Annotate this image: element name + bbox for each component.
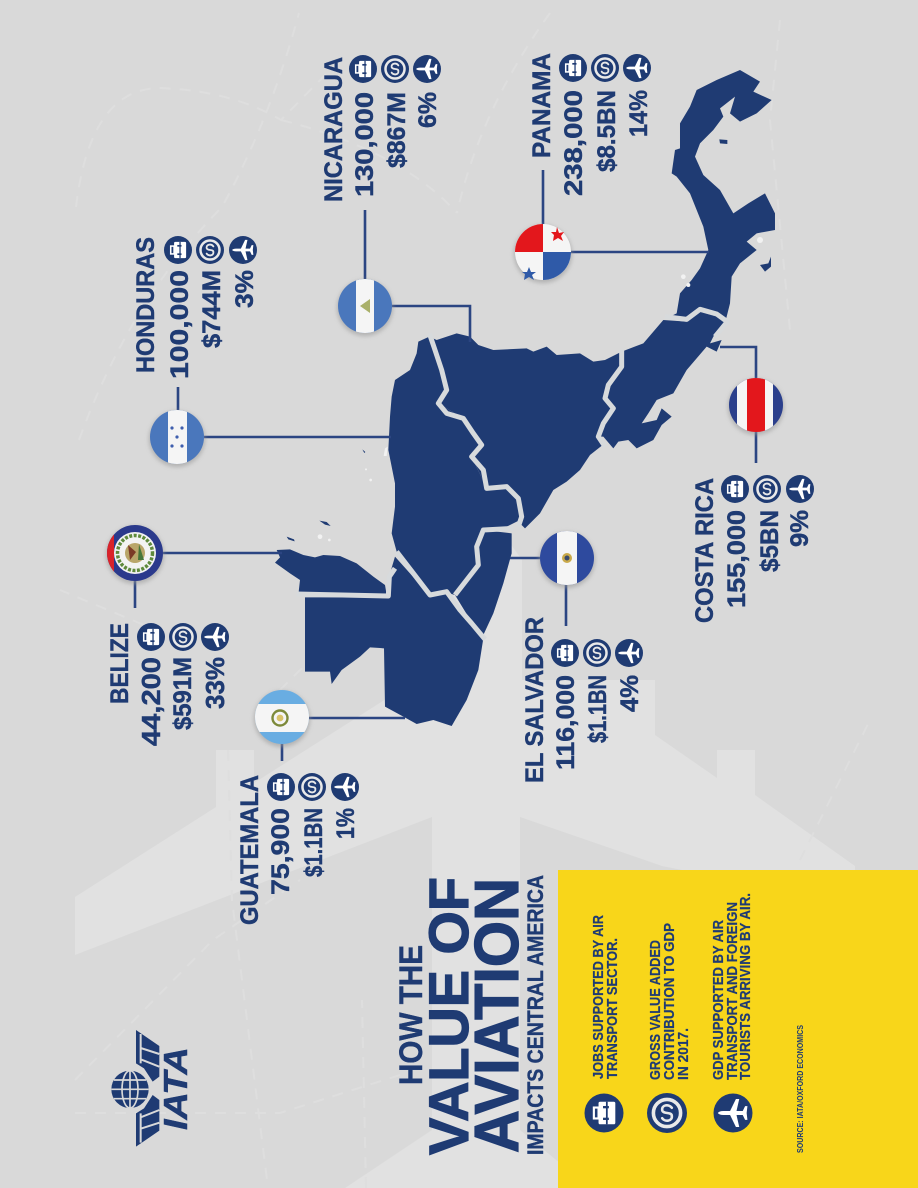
GDP share figure: 9% (786, 510, 814, 547)
small islands (287, 139, 771, 541)
country: Panama (670, 70, 775, 323)
legend text: GDP supported (710, 893, 754, 1080)
GVA figure: $1.1BN (584, 675, 612, 743)
icon: dollar (591, 54, 619, 82)
flag: Belize (105, 525, 164, 584)
jobs figure: 116,000 (552, 675, 580, 770)
national borders (297, 309, 727, 639)
country stats: Honduras (132, 236, 259, 379)
GDP share figure: 1% (332, 808, 360, 839)
country name: NICARAGUA (320, 57, 348, 202)
icon: dollar (298, 773, 326, 801)
legend text: jobs: JOBS SUPPORTED BY AIR (590, 915, 607, 1079)
country: Costa Rica (598, 312, 725, 448)
country: El Salvador (455, 530, 512, 635)
flag: Panama (514, 224, 572, 283)
legend text: jobs (590, 915, 621, 1079)
legend text: gross value added: CONTRIBUTION TO GDP (661, 923, 678, 1080)
GDP share figure: 3% (231, 270, 259, 308)
flag: Nicaragua (337, 279, 393, 336)
icon: jobs (267, 773, 295, 801)
legend icon: plane (714, 1094, 752, 1132)
jobs figure: 238,000 (560, 90, 588, 196)
title block (393, 875, 548, 1155)
jobs figure: 44,200 (136, 657, 166, 746)
icon: plane (331, 773, 359, 801)
connector lines (135, 170, 756, 761)
GVA figure: $744M (198, 270, 226, 348)
background aeroplane silhouette (75, 480, 855, 1188)
white island specks (318, 237, 763, 541)
GDP share figure: 14% (625, 90, 653, 137)
GVA figure: $8.5BN (593, 90, 621, 172)
icon: jobs (137, 623, 165, 651)
icon: plane (615, 639, 643, 667)
legend text: gross value added: GROSS VALUE ADDED (647, 940, 664, 1080)
icon: jobs (551, 639, 579, 667)
country: Belize (275, 549, 387, 595)
icon: dollar (169, 623, 197, 651)
title line: Value of: VALUE OF (417, 877, 480, 1155)
legend icon: jobs (584, 1094, 624, 1132)
icon: dollar (753, 475, 781, 503)
country name: EL SALVADOR (521, 617, 549, 783)
country stats: Nicaragua (320, 55, 442, 202)
map of Central America (275, 70, 775, 726)
country name: BELIZE (106, 623, 134, 704)
jobs figure: 130,000 (351, 92, 379, 197)
jobs figure: 155,000 (723, 510, 751, 608)
IATA logo (111, 1030, 194, 1147)
country: Honduras (388, 337, 520, 595)
logo emblem: globe and wings (111, 1030, 159, 1147)
title line: Aviation: AVIATION (463, 878, 532, 1153)
icon: plane (201, 623, 229, 651)
icon: dollar (196, 236, 224, 264)
icon: dollar (583, 639, 611, 667)
country name: HONDURAS (132, 237, 160, 373)
source note: SOURCE: IATA/OXFORD ECONOMICS (796, 1024, 805, 1153)
GVA figure: $5BN (756, 510, 784, 572)
GVA figure: $867M (383, 92, 411, 168)
icon: jobs (559, 54, 587, 82)
country name: PANAMA (528, 53, 556, 158)
GDP share figure: 33% (200, 657, 230, 709)
icon: jobs (349, 55, 377, 83)
logo wordmark: IATA (157, 1047, 194, 1130)
flag: Guatemala (254, 690, 310, 747)
GVA figure: $591M (169, 657, 197, 730)
legend text: gross value added: IN 2017. (675, 1028, 692, 1080)
legend text: GDP supported: TRANSPORT AND FOREIGN (724, 902, 741, 1080)
flag: El Salvador (539, 531, 595, 588)
GVA figure: $1.1BN (300, 808, 328, 877)
legend icon: dollar (647, 1093, 687, 1133)
country name: GUATEMALA (236, 775, 264, 925)
legend text: GDP supported: GDP SUPPORTED BY AIR (710, 920, 727, 1080)
country stats: Guatemala (236, 773, 360, 925)
icon: plane (229, 236, 257, 264)
flag: Honduras (149, 410, 205, 467)
legend text: jobs: TRANSPORT SECTOR. (604, 938, 621, 1079)
jobs figure: 75,900 (267, 808, 295, 895)
icon: dollar (381, 55, 409, 83)
flag: Costa Rica (728, 378, 784, 435)
icon: jobs (721, 475, 749, 503)
title line: How the: HOW THE (393, 945, 429, 1085)
country: Guatemala (305, 557, 483, 726)
country stats: Costa Rica (691, 475, 814, 623)
country stats: Belize (106, 623, 230, 746)
icon: jobs (164, 236, 192, 264)
country stats: Panama (528, 53, 653, 196)
panel: yellow legend (558, 870, 918, 1188)
country: Nicaragua (429, 333, 622, 528)
GDP share figure: 6% (414, 92, 442, 128)
country stats: El Salvador (521, 617, 644, 783)
icon: plane (623, 54, 651, 82)
icon: plane (786, 475, 814, 503)
GDP share figure: 4% (616, 675, 644, 712)
legend text: GDP supported: TOURISTS ARRIVING BY AIR. (737, 893, 754, 1080)
country name: COSTA RICA (691, 478, 719, 623)
icon: plane (413, 55, 441, 83)
jobs figure: 100,000 (166, 270, 194, 379)
legend text: gross value added (647, 923, 692, 1080)
subtitle: IMPACTS CENTRAL AMERICA (523, 875, 548, 1155)
